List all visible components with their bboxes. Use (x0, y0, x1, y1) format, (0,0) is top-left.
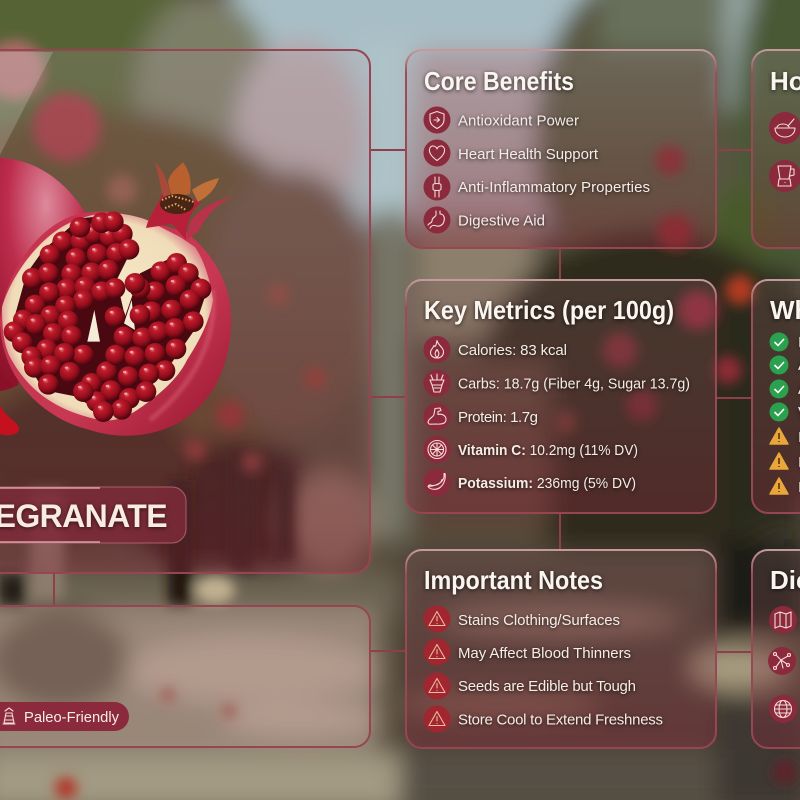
item: potassium: Potassium: 236mg (5% DV) (458, 475, 636, 492)
item: antioxidant power (424, 106, 579, 134)
warning 1 (770, 428, 800, 446)
warning 3 (770, 478, 800, 496)
item: anti-inflammatory properties: Anti-Inflammatory Properties (458, 179, 650, 196)
icon: globe (769, 695, 797, 723)
crown (146, 162, 236, 240)
arils (4, 211, 211, 422)
tag: paleo-friendly (0, 702, 129, 731)
item: calories: Calories: 83 kcal (458, 342, 567, 359)
item: store cool: Store Cool to Extend Freshness (458, 712, 663, 728)
icon: blender (769, 160, 800, 192)
item: digestive aid: Digestive Aid (458, 212, 545, 230)
item: blood thinners: May Affect Blood Thinners (458, 645, 631, 662)
glass shine (0, 52, 53, 155)
item: vitamin c (424, 436, 638, 463)
warning 2 (770, 453, 800, 471)
fallen aril (0, 405, 19, 435)
heading: Key Metrics (per 100g) (424, 295, 674, 325)
item: seeds (424, 672, 636, 700)
icon: bowl (769, 112, 800, 144)
item: protein (424, 403, 538, 430)
item: protein: Protein: 1.7g (458, 409, 538, 426)
whole pomegranate (0, 158, 92, 392)
item: potassium (424, 469, 636, 496)
panel: did you know (cropped) (752, 550, 800, 748)
title plate: pomegranate (0, 487, 186, 543)
panel: dietary tags (0, 606, 370, 747)
tag: paleo-friendly: Paleo-Friendly (24, 710, 120, 726)
cut pomegranate (0, 162, 236, 436)
panel: important notes (406, 550, 716, 748)
panel: hero pomegranate (0, 50, 370, 573)
panel: how to use (cropped) (752, 50, 800, 248)
item: seeds: Seeds are Edible but Tough (458, 678, 636, 695)
item: heart health support: Heart Health Support (458, 146, 599, 163)
item: heart health support (424, 140, 599, 166)
connector lines (54, 150, 752, 652)
illustration: pomegranate fruits (0, 158, 236, 436)
panel: key metrics (406, 280, 716, 513)
heading: Core Benefits (424, 66, 574, 96)
item: vitamin c: Vitamin C: 10.2mg (11% DV) (458, 442, 638, 459)
icon: network (768, 647, 796, 675)
panel: who should eat (cropped) (752, 280, 800, 513)
check 1 (770, 332, 800, 352)
item: antioxidant power: Antioxidant Power (458, 112, 579, 130)
check 4 (770, 402, 800, 422)
item: stains (424, 606, 620, 632)
item: blood thinners (424, 638, 631, 666)
heading: Important Notes (424, 565, 603, 595)
panel: core benefits (406, 50, 716, 248)
skin highlight (150, 290, 213, 420)
item: store cool (424, 706, 663, 732)
item: stains: Stains Clothing/Surfaces (458, 612, 620, 629)
item: anti-inflammatory properties (424, 174, 650, 200)
item: calories (424, 336, 567, 363)
item: carbs (424, 370, 690, 396)
icon: map (769, 606, 797, 634)
item: digestive aid (424, 206, 545, 234)
check 3 (770, 380, 800, 398)
item: carbs: Carbs: 18.7g (Fiber 4g, Sugar 13.7g) (458, 376, 690, 392)
check 2 (770, 356, 800, 374)
